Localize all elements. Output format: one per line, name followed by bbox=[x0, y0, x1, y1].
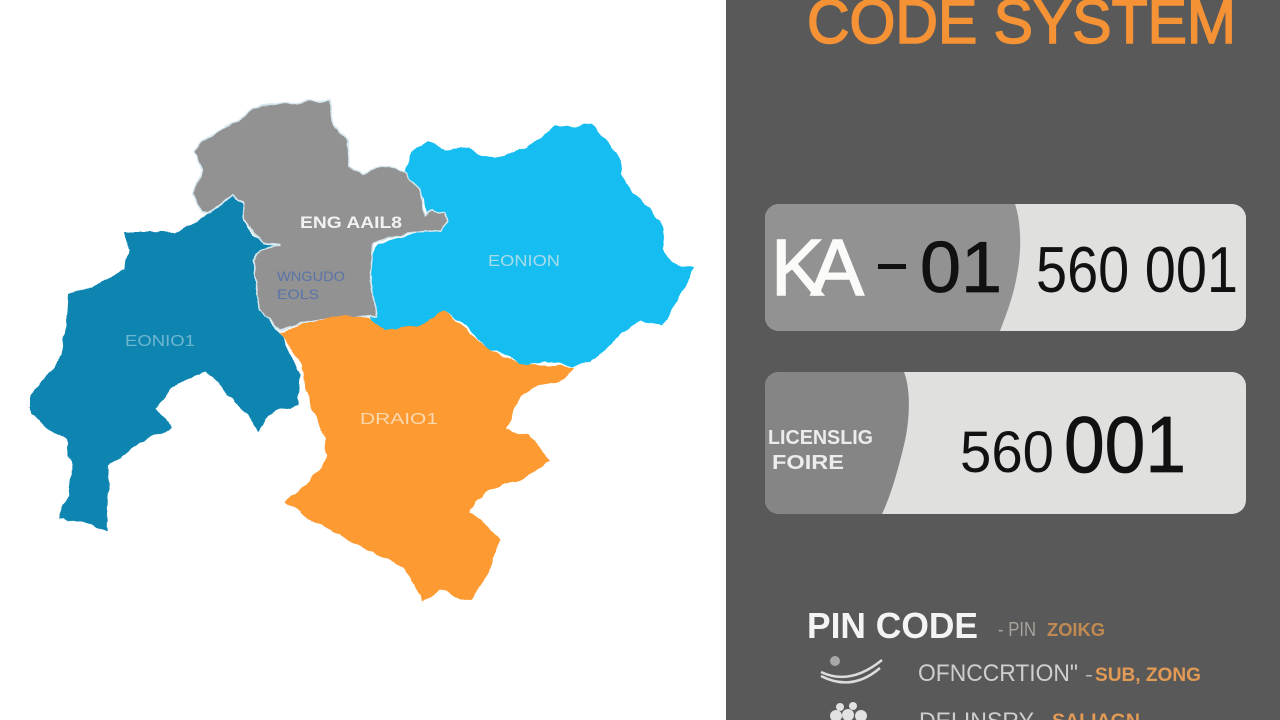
plate: licence code: 001 bbox=[1064, 400, 1186, 489]
plate: licence code bbox=[765, 372, 1246, 514]
region: dark blue bbox=[30, 195, 300, 532]
legend: function sub zone: - bbox=[1085, 665, 1093, 686]
plate: licence code: LICENSLIG bbox=[768, 427, 873, 449]
legend: function sub zone bbox=[918, 660, 1201, 687]
icon: swoosh bbox=[821, 656, 882, 682]
legend: pin code: - PIN bbox=[998, 619, 1036, 641]
plate: vehicle code: 01 bbox=[920, 228, 1002, 308]
legend: delivery zone bbox=[919, 708, 1140, 720]
plate: vehicle code bbox=[765, 204, 1246, 331]
panel: right side bbox=[726, 0, 1280, 720]
legend: pin code bbox=[807, 605, 1105, 646]
legend: function sub zone: OFNCCRTION" bbox=[918, 660, 1078, 687]
plate: vehicle code: 560 001 bbox=[1036, 233, 1238, 306]
region: light blue: EONION bbox=[488, 253, 560, 270]
region: gray: EOLS bbox=[277, 286, 319, 302]
icon: cluster bbox=[830, 702, 867, 720]
region: orange: DRAIO1 bbox=[360, 411, 438, 428]
region: gray: WNGUDO bbox=[277, 268, 345, 284]
region: orange bbox=[280, 310, 574, 602]
plate: licence code: FOIRE bbox=[772, 452, 844, 474]
legend: function sub zone: SUB, ZONG bbox=[1095, 665, 1201, 686]
region: gray bbox=[192, 100, 448, 330]
map of regions bbox=[30, 100, 693, 602]
region: dark blue: EONIO1 bbox=[125, 333, 195, 350]
legend: pin code: PIN CODE bbox=[807, 605, 978, 646]
region: gray: ENG AAIL8 bbox=[300, 213, 402, 232]
legend: pin code: ZOIKG bbox=[1047, 620, 1105, 640]
plate: licence code: 560 bbox=[960, 420, 1054, 485]
region: light blue bbox=[369, 124, 693, 366]
plate: vehicle code: KA bbox=[771, 223, 865, 312]
